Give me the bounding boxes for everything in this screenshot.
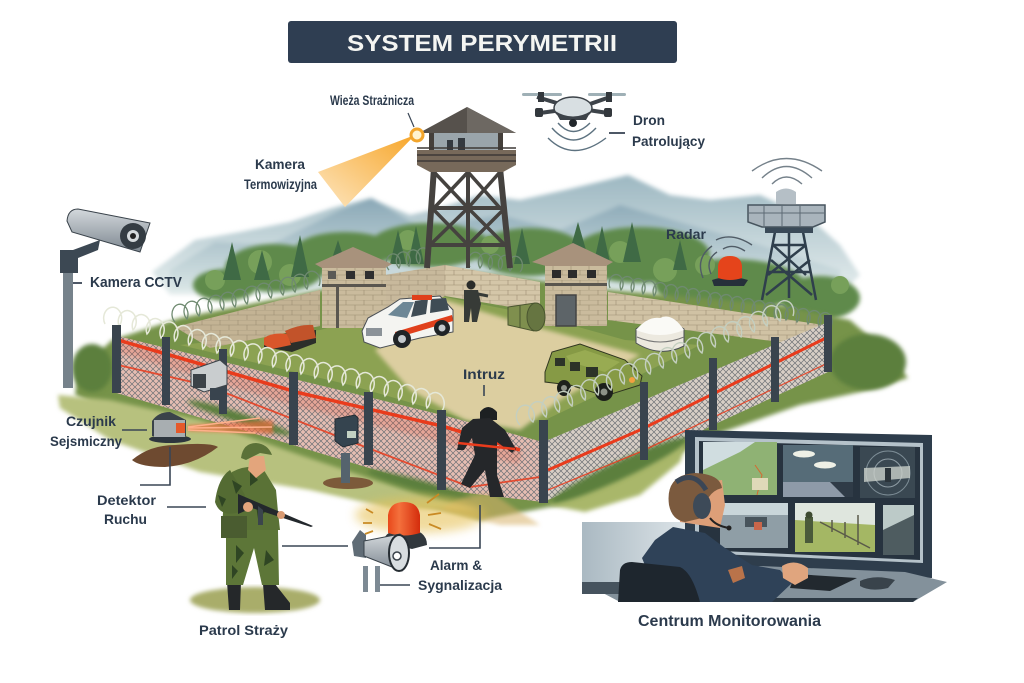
soldier label line — [167, 506, 206, 508]
watch tower — [417, 107, 516, 268]
monitoring centre — [582, 430, 947, 602]
side wall block — [582, 522, 692, 582]
monitor wall — [685, 430, 932, 578]
desk — [582, 566, 947, 602]
title banner — [288, 21, 677, 63]
operator — [642, 527, 792, 602]
label: seismic: Czujnik — [66, 413, 116, 429]
perimeter fence left — [104, 307, 543, 502]
green barrel — [508, 303, 545, 331]
white patrol car — [362, 295, 453, 348]
alarm label lines — [282, 505, 480, 585]
label: drone: Dron — [633, 112, 665, 128]
label: intruder: Intruz — [463, 366, 505, 382]
mouse — [860, 577, 895, 590]
fence posts — [112, 315, 832, 503]
motion detector post — [323, 415, 373, 489]
seismic sensor — [132, 412, 273, 467]
red laser lines — [118, 336, 830, 490]
sensor label lines — [122, 430, 170, 485]
radar tower — [748, 158, 825, 300]
label: drone line two: Patrolujący — [632, 133, 705, 149]
ground — [58, 268, 908, 520]
bushes around fence — [72, 334, 906, 510]
screen: radar — [860, 447, 915, 498]
label: CCTV: Kamera CCTV — [90, 274, 182, 291]
label: alarm line two: Sygnalizacja — [418, 577, 502, 593]
chair — [618, 562, 700, 602]
left guard tower — [315, 247, 392, 328]
label: thermal camera: Kamera — [255, 156, 305, 172]
label: radar: Radar — [666, 226, 707, 242]
label: alarm: Alarm & — [430, 557, 482, 573]
screen: road — [720, 503, 788, 548]
labels — [50, 93, 821, 638]
back walls — [172, 248, 832, 348]
screen: sky — [783, 445, 853, 497]
radar beacon — [700, 237, 752, 286]
right guard tower — [532, 243, 613, 326]
CCTV label line — [73, 282, 82, 284]
soldier — [190, 443, 320, 613]
intruder — [440, 407, 540, 525]
CCTV camera — [60, 209, 150, 388]
orange crates — [264, 325, 316, 352]
screen: field — [795, 503, 875, 552]
interior guard — [464, 280, 488, 322]
drone — [522, 92, 626, 150]
screen: small — [883, 505, 914, 555]
drone label line — [609, 132, 625, 134]
label: monitoring centre: Centrum Monitorowania — [638, 613, 821, 630]
alarm siren and horn — [352, 494, 441, 592]
fence camera box — [191, 360, 227, 400]
intruder label line — [483, 385, 485, 396]
thermal camera beam — [318, 113, 423, 207]
alarm glow — [355, 497, 485, 533]
forest behind walls — [193, 222, 860, 320]
razor wire on back walls — [172, 271, 320, 322]
label: seismic line two: Sejsmiczny — [50, 433, 122, 449]
title banner: SYSTEM PERYMETRII — [347, 30, 617, 56]
label: motion: Detektor — [97, 492, 157, 508]
label: motion line two: Ruchu — [104, 511, 147, 527]
perimeter fence right — [516, 301, 828, 502]
screen: map — [703, 442, 777, 495]
water tank — [636, 316, 684, 351]
label: watch tower: Wieża Strażnicza — [330, 93, 414, 108]
green military vehicle — [545, 344, 642, 401]
label: thermal camera line two: Termowizyjna — [244, 176, 317, 192]
mountains — [152, 175, 860, 295]
keyboard — [790, 574, 857, 591]
label: patrol: Patrol Straży — [199, 622, 288, 638]
